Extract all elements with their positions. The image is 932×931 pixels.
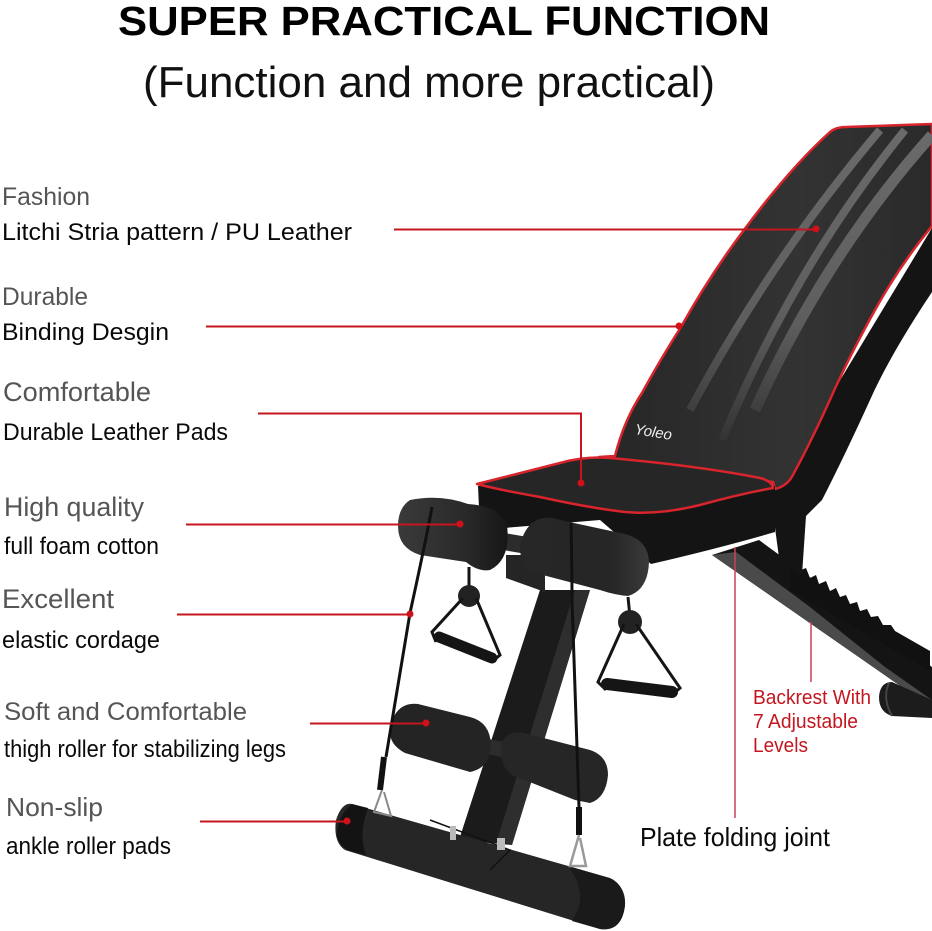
backrest support — [773, 228, 932, 575]
callout: comfortable: Durable Leather Pads — [3, 419, 228, 446]
callout: backrest levels: 7 Adjustable — [753, 711, 858, 733]
callout: fashion — [2, 183, 820, 246]
callout: non-slip: Non-slip — [6, 792, 103, 822]
callout: soft and comfortable: Soft and Comfortable — [4, 698, 247, 726]
bench illustration — [335, 124, 932, 929]
seat pad — [477, 458, 773, 513]
callout: durable: Durable — [2, 283, 88, 311]
callout: durable — [2, 283, 682, 346]
callout: excellent — [2, 584, 414, 654]
ankle roller — [335, 804, 625, 929]
callout: fashion: Litchi Stria pattern / PU Leather — [2, 219, 352, 246]
subtitle: (Function and more practical) — [143, 58, 715, 107]
backrest pad — [599, 124, 932, 489]
callout: high quality: High quality — [4, 492, 144, 522]
callout: fashion: Fashion — [2, 183, 90, 211]
mid rollers — [390, 704, 608, 803]
callout: backrest levels — [753, 622, 871, 757]
callout: backrest levels: Levels — [753, 735, 808, 757]
callout: backrest levels: Backrest With — [753, 687, 871, 709]
brand logo: Yoleo — [633, 421, 673, 444]
top rollers — [398, 498, 649, 596]
right resistance cord — [570, 523, 586, 866]
callout: excellent: Excellent — [2, 584, 115, 614]
callout: soft and comfortable: thigh roller for stabilizing legs — [4, 736, 286, 763]
callout: comfortable: Comfortable — [3, 377, 151, 407]
callout: high quality — [4, 492, 464, 560]
callout: high quality: full foam cotton — [4, 533, 159, 560]
rear rail — [712, 540, 932, 718]
left handle — [432, 567, 500, 660]
callout: plate folding joint: Plate folding joint — [640, 822, 831, 852]
callout: comfortable — [3, 377, 584, 486]
callout: non-slip: ankle roller pads — [6, 833, 171, 860]
callout: soft and comfortable — [4, 698, 430, 763]
callout: durable: Binding Desgin — [2, 319, 169, 346]
front strut — [459, 555, 590, 845]
callout: non-slip — [6, 792, 350, 860]
backrest stripes — [690, 130, 932, 440]
seat box — [478, 486, 775, 564]
left resistance cord — [374, 507, 432, 816]
callout: excellent: elastic cordage — [2, 627, 160, 654]
right handle — [598, 597, 680, 695]
